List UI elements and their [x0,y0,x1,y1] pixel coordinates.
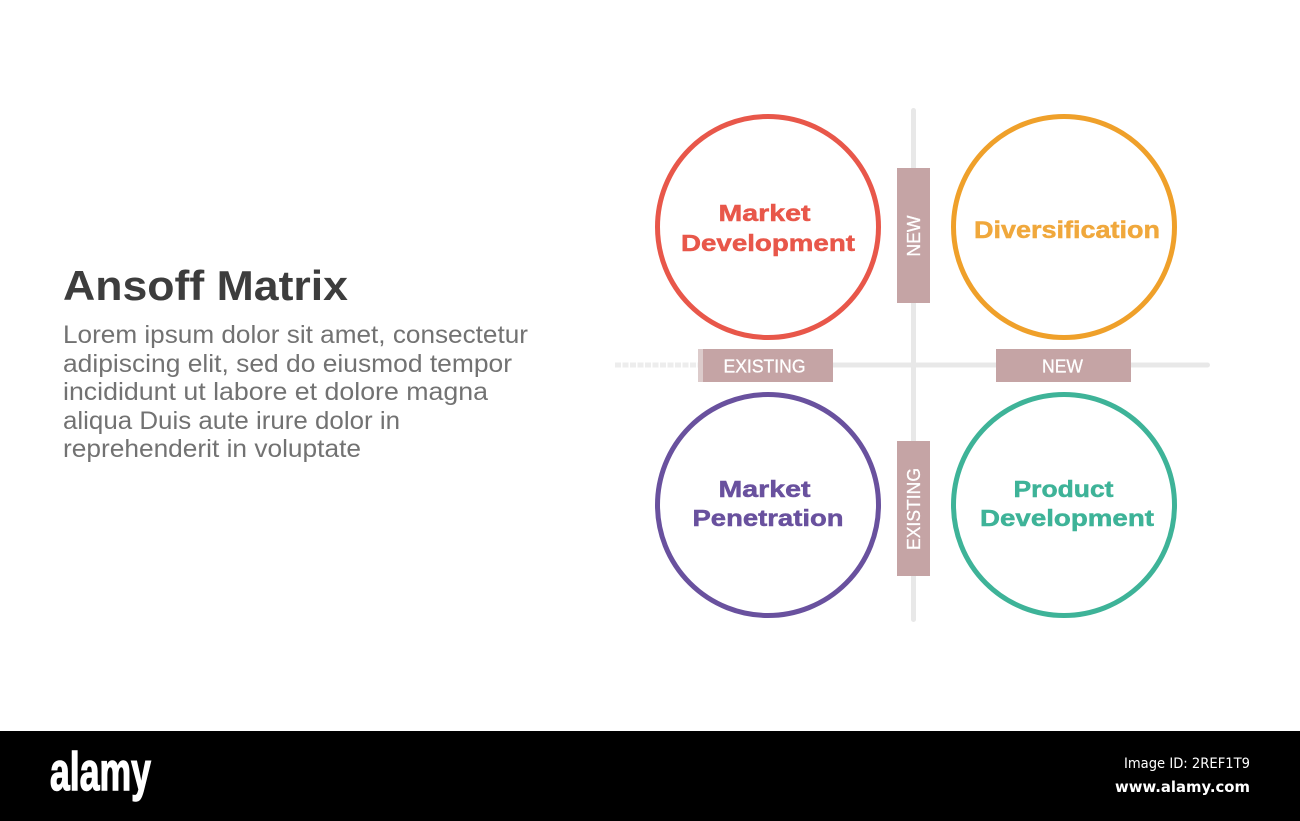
description text block: reprehenderit in voluptate [63,435,361,463]
label: vertical existing: EXISTING [903,468,924,550]
description text block: aliqua Duis aute irure dolor in [63,407,400,435]
label: horizontal new: NEW [1042,356,1084,376]
title: Ansoff Matrix [63,262,349,309]
circle: market development: Market [718,200,811,226]
circle: diversification: Diversification [974,217,1160,244]
circle: market penetration: Penetration [692,505,844,531]
label: horizontal existing [698,349,833,382]
circle: market penetration [658,394,878,616]
circle: diversification [954,116,1174,338]
circle: market development [658,116,878,338]
description text block [63,321,528,463]
footer logo: alamy [50,742,151,802]
description text block: incididunt ut labore et dolore magna [63,378,488,406]
description text block: adipiscing elit, sed do eiusmod tempor [63,350,512,378]
footer band [0,731,1300,821]
circle: product development [954,394,1174,616]
label: vertical new: NEW [903,215,924,256]
circle: market development: Development [681,230,855,256]
website: www.alamy.com [1115,778,1250,796]
circle: market penetration: Market [718,476,811,502]
label: vertical new [897,168,930,303]
label: horizontal existing: EXISTING [724,356,806,376]
matrix axes [615,108,1210,622]
label: vertical existing [897,441,930,576]
circle: product development: Product [1014,476,1114,502]
image id: Image ID: 2REF1T9 [1124,756,1250,772]
label: horizontal new [996,349,1131,382]
description text block: Lorem ipsum dolor sit amet, consectetur [63,321,528,349]
circle: product development: Development [980,505,1154,531]
